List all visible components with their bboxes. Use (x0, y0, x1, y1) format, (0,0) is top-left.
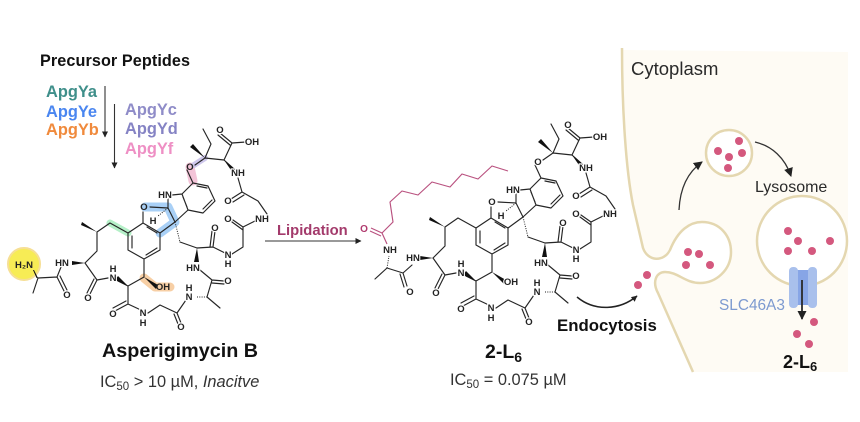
atom labels: N (186, 292, 193, 303)
arrow: efflux (801, 280, 803, 319)
skeleton: N (534, 287, 541, 298)
alanine residue (375, 245, 414, 298)
panel: cell cytoplasm (622, 48, 848, 372)
arrow: right peptides (114, 104, 116, 168)
skeleton: O (572, 209, 580, 220)
atom labels: O (84, 293, 92, 304)
atom labels: O (63, 290, 71, 301)
lysosome (757, 196, 847, 286)
title: 2-L6: 6 (514, 349, 522, 365)
cell membrane (622, 48, 731, 372)
peptide list: left: ApgYb (46, 121, 99, 139)
lipid tail: O (360, 224, 368, 235)
atom labels: O (186, 162, 194, 173)
skeleton: N (573, 245, 580, 256)
alanine residue: O (406, 287, 414, 298)
arrow: to lysosome (755, 142, 791, 176)
transporter: SLC46A3 (789, 267, 817, 308)
title: 2-L6: 2-L (485, 341, 514, 363)
atom labels: H (110, 264, 117, 275)
particles: entering endosome (634, 248, 714, 289)
activity: asperigimycin B: > 10 µM, (129, 373, 203, 391)
atom labels: OH (156, 282, 170, 293)
skeleton: H (458, 259, 465, 270)
label: lysosome: Lysosome (755, 179, 827, 196)
peptide list: left (46, 83, 99, 139)
atom labels: N (110, 273, 117, 284)
label: 2-L6 released: 6 (810, 359, 817, 374)
peptide list: left: ApgYa (46, 83, 98, 101)
label: SLC46A3: SLC46A3 (719, 297, 785, 314)
highlights: modified residues (110, 158, 205, 287)
skeleton: O (525, 317, 533, 328)
atom labels: NH (231, 168, 245, 179)
title: asperigimycin B: Asperigimycin B (102, 340, 258, 362)
molecule: asperigimycin B (8, 125, 269, 333)
heading: precursor peptides: Precursor Peptides (40, 52, 190, 70)
activity: asperigimycin B: Inacitve (203, 373, 259, 391)
skeleton: H (573, 254, 580, 265)
skeleton: NH (579, 163, 593, 174)
alanine residue: NH (383, 245, 397, 256)
label: endocytosis: Endocytosis (557, 316, 657, 335)
atom labels: HN (55, 258, 69, 269)
atom labels: HN (158, 190, 172, 201)
atom labels: H (150, 216, 157, 227)
atom labels: HN (186, 263, 200, 274)
atom labels: H (225, 259, 232, 270)
skeleton: N (488, 303, 495, 314)
skeleton: H (488, 313, 495, 324)
skeleton: H (498, 211, 505, 222)
arrow: endocytosis (577, 296, 637, 307)
atom labels: N (140, 308, 147, 319)
activity: 2-L6: IC (450, 371, 466, 389)
skeleton: HN (506, 185, 520, 196)
skeleton: O (534, 157, 542, 168)
skeleton: OH (593, 132, 607, 143)
skeleton: N (458, 268, 465, 279)
activity: 2-L6: 50 (466, 379, 479, 391)
peptide list: right: ApgYf (125, 140, 174, 158)
label: cytoplasm: Cytoplasm (631, 58, 718, 79)
skeleton: HN (406, 253, 420, 264)
arrow: left peptides (104, 86, 106, 137)
skeleton: H (534, 278, 541, 289)
atom labels (15, 125, 269, 333)
skeleton: HN (534, 258, 548, 269)
arrow: lipidation: Lipidation (277, 223, 348, 239)
atom labels: N (225, 250, 232, 261)
skeleton: OH (504, 277, 518, 288)
skeleton: O (488, 197, 496, 208)
skeleton bonds (33, 129, 267, 324)
skeleton: O (572, 191, 580, 202)
activity: asperigimycin B: IC (100, 373, 116, 391)
atom labels: NH (255, 214, 269, 225)
arrow: lipidation (265, 223, 361, 241)
atom labels: O (216, 125, 224, 136)
atom labels: O (177, 322, 185, 333)
skeleton: O (564, 120, 572, 131)
atom labels: O (224, 196, 232, 207)
skeleton: O (432, 288, 440, 299)
skeleton: O (457, 304, 465, 315)
activity: 2-L6: = 0.075 µM (479, 371, 567, 389)
peptide list: left: ApgYe (46, 103, 97, 121)
peptide list: right (125, 101, 178, 158)
peptide list: right: ApgYc (125, 101, 177, 119)
highlight: amine (8, 248, 40, 280)
skeleton: NH (603, 209, 617, 220)
peptide list: right: ApgYd (125, 120, 178, 138)
atom labels: O (224, 214, 232, 225)
arrow: to vesicle (679, 162, 702, 210)
particles: released (793, 318, 818, 348)
skeleton: O (572, 271, 580, 282)
atom labels: O (140, 202, 148, 213)
atom labels: OH (245, 137, 259, 148)
activity: asperigimycin B: 50 (116, 381, 129, 393)
atom labels: H (186, 283, 193, 294)
molecule: 2-L6 (360, 120, 617, 328)
vesicle (706, 130, 752, 176)
lipid tail (360, 166, 508, 244)
atom labels: O (109, 309, 117, 320)
atom labels: O (211, 223, 219, 234)
atom labels: H₂N (15, 260, 33, 271)
skeleton: O (559, 218, 567, 229)
skeleton (406, 120, 617, 328)
atom labels: H (140, 318, 147, 329)
atom labels: O (224, 276, 232, 287)
label: 2-L6 released: 2-L (783, 352, 810, 372)
